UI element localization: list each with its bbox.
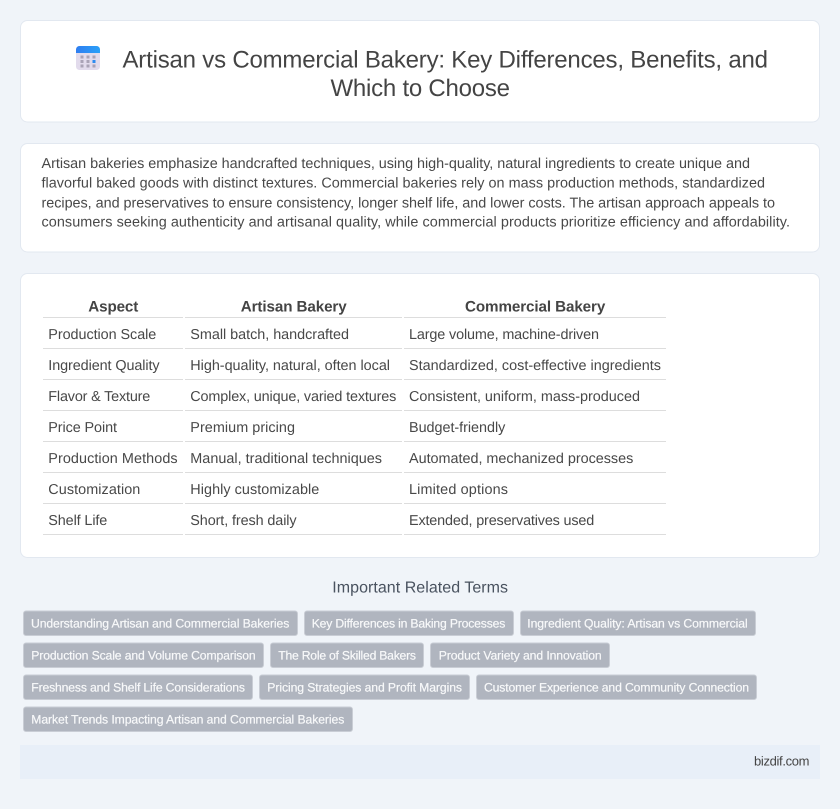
tag: The Role of Skilled Bakers (278, 648, 416, 662)
table row: shelf life: Short, fresh daily (190, 513, 297, 529)
tag: Production Scale and Volume Comparison (31, 648, 256, 662)
tag (430, 643, 610, 668)
tag: Pricing Strategies and Profit Margins (267, 680, 462, 694)
tag (24, 707, 352, 732)
tag: Ingredient Quality: Artisan vs Commercial (527, 616, 748, 630)
icon: calendar (76, 46, 100, 70)
tag (24, 643, 264, 668)
table header: Artisan Bakery (241, 299, 347, 316)
title: Artisan vs Commercial Bakery: Key Differences, Benefits, and (122, 46, 768, 74)
table header: Commercial Bakery (465, 299, 606, 316)
table row: ingredient quality: High-quality, natural, often local (190, 358, 390, 374)
footer (20, 745, 820, 779)
text block: introduction (42, 156, 790, 231)
table row: ingredient quality: Standardized, cost-effective ingredients (409, 358, 661, 374)
table row: production methods: Production Methods (48, 451, 178, 467)
panel: comparison table (20, 274, 820, 558)
table row: flavor and texture: Flavor & Texture (48, 389, 150, 405)
tag: Key Differences in Baking Processes (312, 616, 505, 630)
table row: ingredient quality (48, 358, 661, 374)
text block: introduction: Artisan bakeries emphasize handcrafted techniques, using high-quality, natural ingredients to create unique and (42, 156, 750, 172)
footer: bizdif.com (754, 754, 810, 769)
tag (24, 611, 298, 636)
title (122, 46, 768, 102)
table row: production scale: Large volume, machine-driven (409, 327, 599, 343)
table row: price point: Price Point (48, 420, 117, 436)
table row: production methods: Manual, traditional techniques (190, 451, 382, 467)
table row: price point: Budget-friendly (409, 420, 506, 436)
table header (88, 299, 606, 316)
tag: Product Variety and Innovation (439, 648, 602, 662)
table row: customization: Limited options (409, 482, 508, 498)
table row: shelf life (48, 513, 594, 529)
table row: shelf life: Extended, preservatives used (409, 513, 594, 529)
table row: production methods (48, 451, 633, 467)
table row: customization (48, 482, 508, 498)
table header: Aspect (88, 299, 138, 316)
tag (270, 643, 424, 668)
table row: flavor and texture: Consistent, uniform, mass-produced (409, 389, 640, 405)
table row: customization: Highly customizable (190, 482, 319, 498)
table row: production methods: Automated, mechanized processes (409, 451, 633, 467)
table row: price point (48, 420, 506, 436)
table row: production scale: Production Scale (48, 327, 156, 343)
tag: Understanding Artisan and Commercial Bakeries (31, 616, 289, 630)
tag (260, 675, 470, 700)
tag: Market Trends Impacting Artisan and Commercial Bakeries (31, 712, 344, 726)
text block: introduction: flavorful baked goods with distinct textures. Commercial bakeries rely on mass production methods, standardized (42, 176, 765, 192)
tag (304, 611, 514, 636)
text block: introduction: recipes, and preservatives to ensure consistency, longer shelf life, and lower costs. The artisan approach appeals to (42, 195, 775, 211)
table row: production scale (48, 327, 599, 343)
panel: introduction text (20, 144, 820, 252)
text block: introduction: consumers seeking authenticity and artisanal quality, while commercial products prioritize efficiency and affordability. (42, 215, 790, 231)
title: Which to Choose (330, 75, 510, 102)
panel: title card (20, 20, 820, 122)
tag (520, 611, 756, 636)
table row: flavor and texture (48, 389, 640, 405)
tag: Customer Experience and Community Connection (484, 680, 749, 694)
table row: ingredient quality: Ingredient Quality (48, 358, 160, 374)
table row: production scale: Small batch, handcrafted (190, 327, 349, 343)
tag (24, 675, 252, 700)
table row: customization: Customization (48, 482, 140, 498)
tag (476, 675, 756, 700)
table row: flavor and texture: Complex, unique, varied textures (190, 389, 396, 405)
panel: related term tags (24, 611, 756, 732)
table row: shelf life: Shelf Life (48, 513, 107, 529)
table row: price point: Premium pricing (190, 420, 295, 436)
tag: Freshness and Shelf Life Considerations (31, 680, 245, 694)
heading: important related terms: Important Related Terms (332, 580, 508, 597)
